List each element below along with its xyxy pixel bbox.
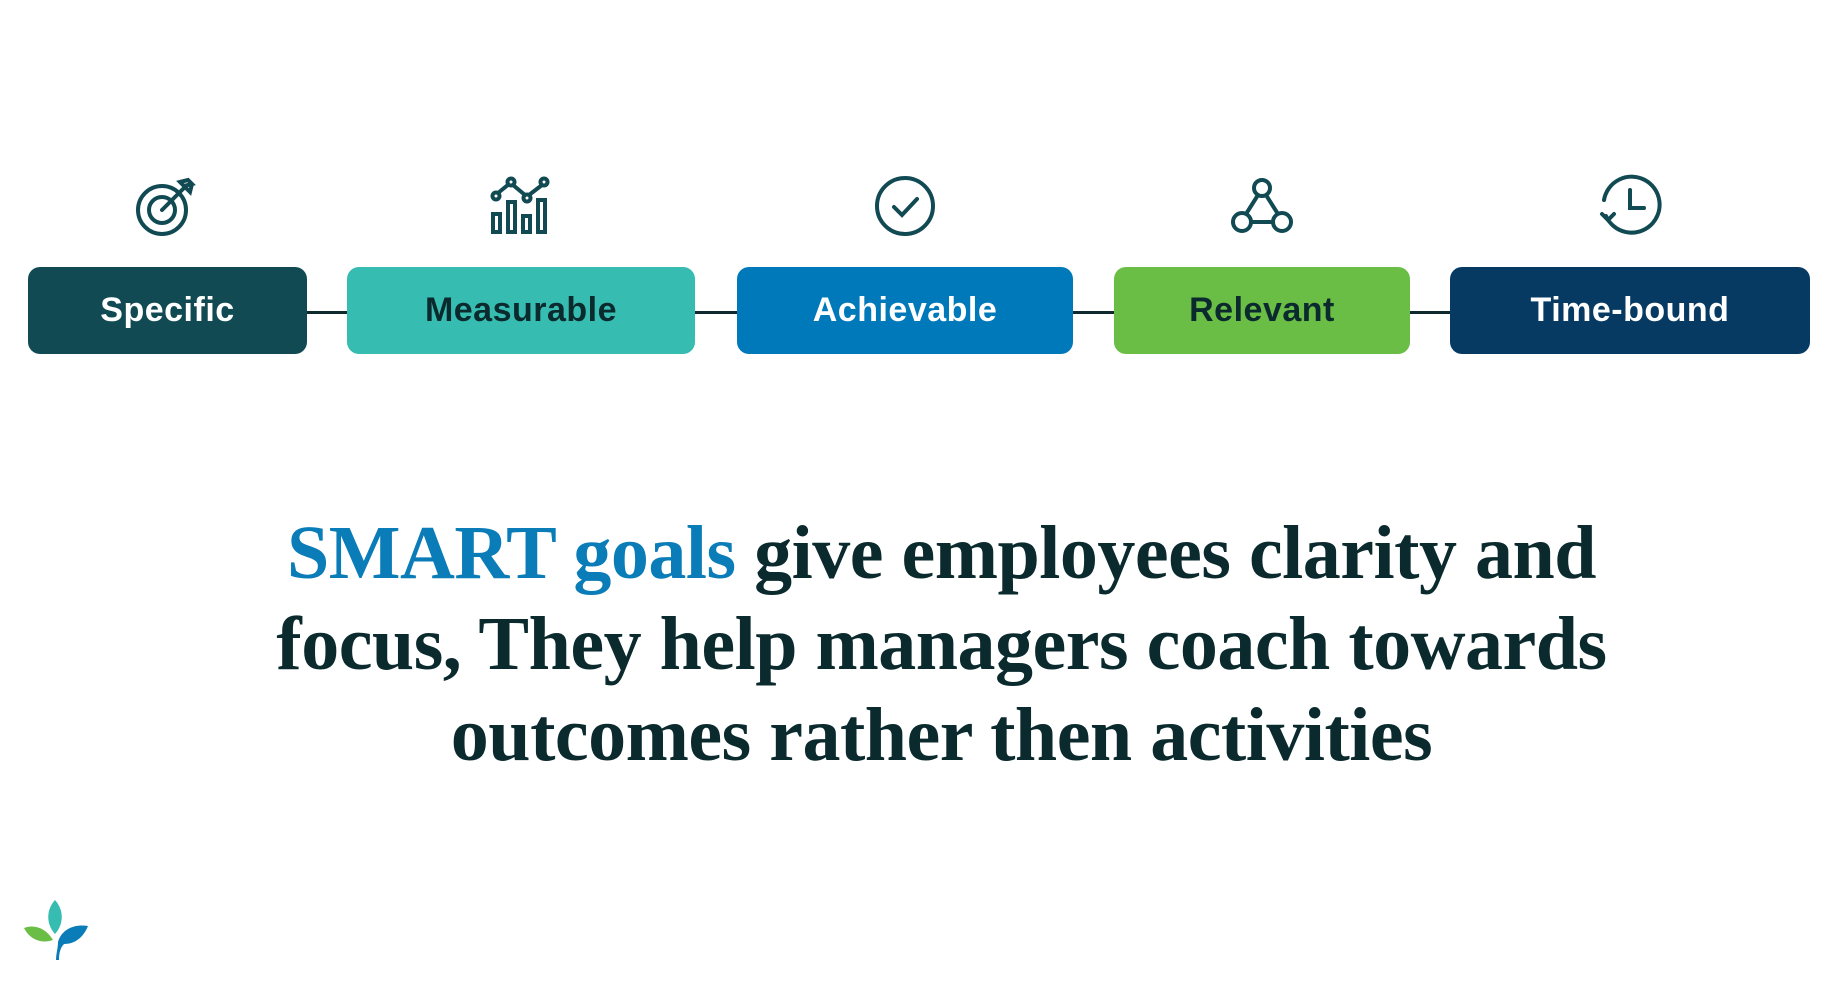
icon: check circle: [875, 176, 935, 236]
box: Relevant: Relevant: [1189, 291, 1335, 329]
box: Achievable: Achievable: [813, 291, 997, 329]
icon: clock: [1600, 174, 1662, 235]
icon: chart: [490, 176, 550, 234]
logo: [24, 900, 88, 960]
icon: target: [136, 178, 196, 236]
headline: outcomes rather then activities: [451, 693, 1432, 777]
box: Measurable: Measurable: [425, 291, 617, 329]
box: Specific: Specific: [100, 291, 235, 329]
headline: focus, They help managers coach towards: [276, 602, 1607, 686]
headline: [276, 511, 1607, 777]
box: Measurable: [347, 267, 695, 354]
box: Specific: [28, 267, 307, 354]
box: Time-bound: [1450, 267, 1810, 354]
box: Time-bound: Time-bound: [1531, 291, 1729, 329]
box: Relevant: [1114, 267, 1410, 354]
headline: SMART goals give employees clarity and: [287, 511, 1596, 595]
box: Achievable: [737, 267, 1073, 354]
icon: network: [1231, 178, 1293, 233]
